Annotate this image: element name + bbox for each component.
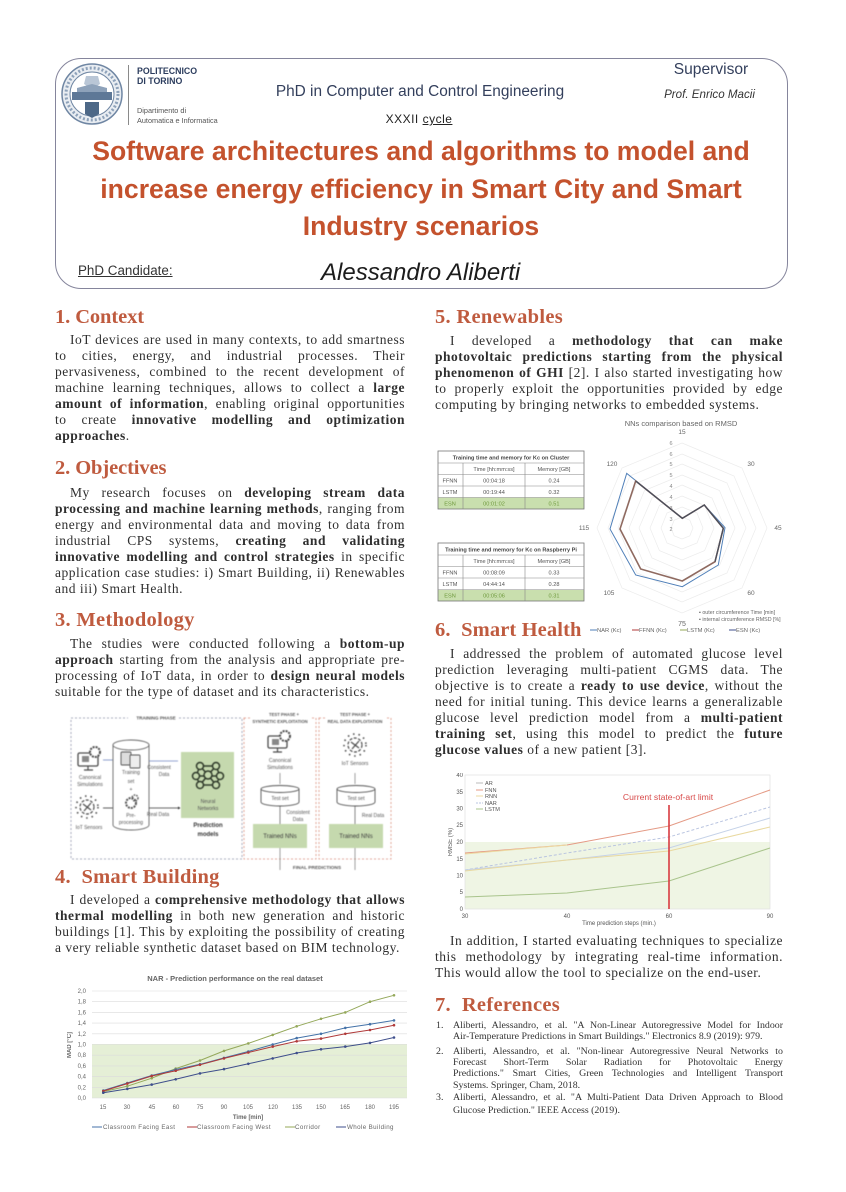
test 2 test set: Test set [347, 796, 365, 802]
table: raspberry pi training time and memory: 00:08:09 [483, 570, 505, 576]
y axis labels: 2,0 [78, 989, 87, 995]
table: raspberry pi training time and memory: 0.28 [549, 582, 559, 588]
y axis labels: 10 [456, 874, 464, 880]
cycle: XXXII cycle [386, 112, 452, 126]
radial scale labels: 3 [669, 517, 673, 523]
arrows into training set [103, 760, 113, 808]
test phase synthetic frame [244, 710, 316, 859]
pipeline diagram: Data [159, 772, 169, 778]
chart title: NAR - Prediction performance on the real dataset [147, 974, 323, 983]
chart legend: AR [485, 781, 493, 787]
x axis labels: 90 [767, 914, 774, 920]
y axis labels [456, 773, 464, 913]
title: increase energy efficiency in Smart City and Smart [100, 174, 742, 204]
text: objectives: industrial CPS systems, creating and validating [55, 533, 405, 548]
y axis labels: 0 [460, 907, 464, 913]
test 1 trained networks [253, 824, 307, 848]
radar axis labels: 15 [678, 429, 686, 436]
arrows to final predictions [280, 848, 355, 870]
radial scale labels: 5 [669, 473, 673, 479]
radar axis labels: 75 [678, 621, 686, 628]
table: cluster training time and memory: Training time and memory for Kc on Cluster [453, 456, 570, 462]
text: smart health: prediction leveraging multi-patient CGMS data. The [435, 662, 783, 677]
table: cluster training time and memory: 0.51 [549, 502, 559, 508]
heading: smart building: 4. Smart Building [55, 866, 220, 888]
y axis labels: 1,2 [78, 1032, 87, 1038]
y axis labels: 35 [456, 790, 464, 796]
line chart: NAR prediction performance [67, 974, 407, 1131]
table: raspberry pi training time and memory: Memory [GB] [538, 559, 571, 565]
table: raspberry pi training time and memory: 00:05:06 [483, 594, 505, 600]
line chart: RMSE vs time prediction steps [448, 773, 774, 927]
table: raspberry pi training time and memory: 04:44:14 [483, 582, 505, 588]
label: iot sensors: IoT Sensors [76, 825, 103, 831]
heading: references: 7. References [435, 994, 560, 1016]
logo divider and university name: Automatica e Informatica [137, 116, 218, 125]
chart legend: Classroom Facing West [197, 1124, 271, 1131]
radar title: NNs comparison based on RMSD [625, 419, 738, 428]
series: NAR [610, 473, 725, 587]
x axis labels: 120 [268, 1105, 279, 1111]
logo divider and university name: Dipartimento di [137, 106, 186, 115]
y axis labels [78, 989, 87, 1102]
radar legend: LSTM (Kc) [687, 628, 715, 634]
text: context: IoT devices are used in many contexts, to add smartness [70, 332, 405, 347]
radial scale labels: 5 [669, 462, 673, 468]
neural networks box: Neural [201, 799, 215, 805]
label: consistent data: Consistent [147, 765, 171, 771]
x axis labels: 135 [292, 1105, 303, 1111]
x axis labels: 40 [564, 914, 571, 920]
text: smart building: a very reliable synthetic dataset based on BIM technology. [55, 940, 400, 955]
test phase real data frame: REAL DATA EXPLOITATION [328, 719, 382, 724]
text: objectives: and iii) Smart Health. [55, 581, 183, 596]
label: canonical simulations: Canonical [79, 775, 101, 781]
references list: Systems. Springer, Cham, 2018. [453, 1080, 580, 1091]
series: ESN [636, 481, 723, 562]
text: context: pervasiveness, combined to the recent development of [55, 364, 405, 379]
chart legend: NAR [485, 801, 497, 807]
chart legend: RNN [485, 794, 497, 800]
green target band [465, 842, 770, 909]
table: cluster training time and memory: Time [hh:mm:ss] [473, 467, 515, 473]
text: smart building: I developed a comprehensive methodology that allows [70, 892, 405, 907]
x axis title: Time prediction steps (min.) [582, 921, 656, 927]
table: raspberry pi training time and memory: 0.33 [549, 570, 559, 576]
x axis labels: 90 [221, 1105, 228, 1111]
text: smart building: thermal modelling in both new generation and historic [55, 908, 405, 923]
series lines [465, 790, 770, 897]
text: smart health: glucose level prediction model from a multi-patient [435, 710, 783, 725]
x axis labels: 15 [100, 1105, 107, 1111]
text: objectives: energy and environmental data and moving to data from [55, 517, 405, 532]
table: cluster training time and memory: LSTM [443, 490, 458, 496]
text: context: machine learning techniques, allows to collect a large [55, 380, 405, 395]
label: real data: Real Data [147, 812, 169, 818]
x axis labels: 60 [173, 1105, 180, 1111]
phd candidate label: PhD Candidate: [78, 263, 173, 278]
text: smart building [55, 892, 405, 955]
references list: Aliberti, Alessandro, et al. "A Multi-Patient Data Driven Approach to Blood [453, 1092, 783, 1103]
text: evaluation follow up: In addition, I started evaluating techniques to specialize [450, 933, 783, 948]
references list: Glucose Prediction." IEEE Access (2019). [453, 1105, 620, 1116]
icon: iot sensors [76, 796, 98, 818]
radar axis labels: 45 [774, 525, 782, 532]
training set cylinder: + [130, 787, 133, 793]
table: cluster training time and memory: 0.32 [549, 490, 559, 496]
label: canonical simulations: Simulations [77, 782, 103, 788]
table: raspberry pi training time and memory: Training time and memory for Kc on Raspberry Pi [445, 548, 577, 554]
text: methodology: processing of IoT data, in order to design neural models [55, 668, 405, 683]
chart legend: Whole Building [347, 1124, 394, 1131]
text: smart health: training set, using this model to predict the future [435, 726, 783, 741]
heading: methodology: 3. Methodology [55, 609, 195, 631]
candidate name: Alessandro Aliberti [321, 259, 520, 286]
text: context: amount of information, enabling original opportunities [55, 396, 405, 411]
test 2 label: iot sensors: IoT Sensors [342, 761, 369, 767]
table: raspberry pi training time and memory [438, 542, 584, 602]
logo divider and university name [128, 65, 229, 125]
text: renewables: I developed a methodology that can make [450, 333, 783, 348]
radial scale labels: 4 [669, 495, 673, 501]
programme title: PhD in Computer and Control Engineering [276, 83, 564, 100]
green target band [92, 1044, 407, 1098]
references list [436, 1020, 783, 1116]
test 1 icon: monitor [268, 731, 290, 752]
text: context: approaches. [55, 428, 130, 443]
radar axis labels: 115 [579, 525, 590, 532]
arrows to neural networks [149, 761, 180, 810]
radial scale labels: 6 [669, 441, 673, 447]
y axis labels: 0,6 [78, 1064, 87, 1070]
label: prediction models: models [197, 832, 219, 838]
text: objectives: processing and machine learning methods, ranging from [55, 501, 405, 516]
y axis labels: 0,4 [78, 1075, 87, 1081]
y axis labels: 0,2 [78, 1085, 87, 1091]
table: cluster training time and memory [438, 450, 584, 510]
series: classroom facing west [103, 1025, 394, 1091]
radial scale labels [669, 441, 673, 533]
test phase real data frame [319, 710, 391, 859]
chart legend: FNN [485, 788, 496, 794]
text: renewables: photovoltaic predictions starting from the physical [435, 349, 783, 364]
references list: Aliberti, Alessandro, et al. "Non-linear Autoregressive Neural Networks to [453, 1046, 783, 1057]
table: raspberry pi training time and memory: Time [hh:mm:ss] [473, 559, 515, 565]
text: renewables: to properly exploit the opportunities provided by edge [435, 381, 783, 396]
test 2 test set [337, 773, 375, 824]
radar notes: ▪ outer circumference Time [min] [699, 610, 776, 616]
radar axis labels: 60 [747, 590, 755, 597]
chart legend [476, 781, 500, 813]
references list: 3. [436, 1092, 443, 1103]
text: objectives: My research focuses on developing stream data [70, 485, 405, 500]
test 1 test set [261, 773, 299, 824]
supervisor name: Prof. Enrico Macii [664, 88, 755, 101]
text: evaluation follow up [435, 933, 783, 980]
y axis labels: 0,8 [78, 1053, 87, 1059]
test 2 icon: iot sensors [344, 734, 366, 756]
test phase real data frame: TEST PHASE + [340, 712, 371, 717]
test phase synthetic frame: SYNTHETIC EXPLOITATION [252, 719, 308, 724]
references list: Forecast Short-Term Solar Radiation for Photovoltaic Energy [453, 1057, 783, 1068]
text: smart building: buildings [1]. This by exploiting the possibility of creating [55, 924, 405, 939]
test phase synthetic frame: TEST PHASE + [269, 712, 300, 717]
y axis labels: 25 [456, 823, 464, 829]
heading: objectives: 2. Objectives [55, 457, 166, 479]
text: renewables: phenomenon of GHI [2]. I also started investigating how [435, 365, 783, 380]
x axis labels: 150 [316, 1105, 327, 1111]
y axis labels: 40 [456, 773, 464, 779]
training phase frame: TRAINING PHASE [136, 716, 176, 720]
references list: Aliberti, Alessandro, et al. "A Non-Linear Autoregressive Model for Indoor [453, 1020, 783, 1031]
text: evaluation follow up: This would allow the tool to specialize on the end-user. [435, 965, 761, 980]
table: cluster training time and memory: Memory [GB] [538, 467, 571, 473]
references list: 1. [436, 1020, 443, 1031]
title: Software architectures and algorithms to model and [92, 136, 750, 166]
radar notes: ▪ internal circumference RMSD [%] [699, 617, 781, 623]
text: smart health: objective is to create a ready to use device, without the [435, 678, 783, 693]
radar legend [590, 628, 760, 634]
series: corridor [103, 995, 394, 1092]
text: methodology: The studies were conducted following a bottom-up [70, 636, 405, 651]
y axis labels: 1,4 [78, 1021, 87, 1027]
logo divider and university name: POLITECNICO [137, 66, 197, 76]
test 1 label: consistent data: Consistent [286, 810, 310, 816]
radar chart: NNs comparison based on RMSD [579, 419, 782, 634]
y axis labels: 1,0 [78, 1042, 87, 1048]
text: smart health: need for initial tuning. This device learns a generalizable [435, 694, 783, 709]
radar legend: FFNN (Kc) [639, 628, 667, 634]
state-of-art label: Current state-of-art limit [623, 792, 714, 802]
radar rings [597, 443, 767, 613]
y axis labels: 1,8 [78, 1000, 87, 1006]
text: objectives: application case studies: i) Smart Building, ii) Renewables [55, 565, 405, 580]
neural networks box [181, 752, 234, 818]
radial scale labels: 4 [669, 484, 673, 490]
radar axis labels: 30 [747, 461, 755, 468]
y axis labels: 1,6 [78, 1010, 87, 1016]
radar legend: NAR (Kc) [597, 628, 622, 634]
icon: university seal [61, 63, 123, 125]
test 1 label: consistent data: Data [293, 817, 303, 823]
radial scale labels: 3 [669, 506, 673, 512]
text: renewables: computing by bringing networks to embedded systems. [435, 397, 759, 412]
chart legend [92, 1124, 394, 1131]
x axis labels: 165 [340, 1105, 351, 1111]
training set cylinder: Pre- [126, 813, 136, 819]
series: whole building [103, 1038, 394, 1093]
text: smart health [435, 646, 783, 757]
table: cluster training time and memory: FFNN [443, 478, 457, 484]
text: methodology: suitable for the type of dataset and its characteristics. [55, 684, 370, 699]
references list: Air-Temperature Predictions in Smart Buildings." Electronics 8.9 (2019): 979. [453, 1031, 762, 1042]
test 1 trained networks: Trained NNs [263, 834, 297, 840]
title [92, 136, 750, 241]
table: cluster training time and memory: 00:01:02 [483, 502, 505, 508]
text: objectives [55, 485, 405, 596]
state-of-art limit line [668, 805, 670, 909]
radar axis labels: 120 [607, 461, 618, 468]
table: raspberry pi training time and memory: FFNN [443, 570, 457, 576]
supervisor: Supervisor [674, 61, 748, 78]
training set cylinder: set [128, 779, 135, 785]
text: smart health: glucose values of a new patient [3]. [435, 742, 647, 757]
text: context: to cities, energy, and industrial processes. Their [55, 348, 405, 363]
test 1 test set: Test set [271, 796, 289, 802]
x axis labels [100, 1105, 400, 1111]
neural networks box: Networks [198, 806, 219, 812]
x axis labels: 30 [124, 1105, 131, 1111]
x axis title: Time [min] [233, 1115, 263, 1121]
table: raspberry pi training time and memory: 0.31 [549, 594, 559, 600]
label: prediction models: Prediction [193, 823, 223, 829]
chart legend: Classroom Facing East [103, 1124, 175, 1131]
table: cluster training time and memory: ESN [444, 502, 456, 508]
chart legend: LSTM [485, 807, 500, 813]
test 2 trained networks [329, 824, 383, 848]
y axis title: MAD [°C] [67, 1032, 73, 1058]
test 1 label: canonical simulations: Canonical [269, 758, 291, 764]
series: classroom facing east [103, 1020, 394, 1090]
x axis labels [462, 914, 774, 920]
text: objectives: innovative modelling and control strategies in specific [55, 549, 405, 564]
radial scale labels: 2 [669, 527, 673, 533]
radar axis labels [579, 429, 782, 628]
y axis labels: 15 [456, 857, 464, 863]
references list: Predictions." Smart Cities, Green Technologies and Intelligent Transport [453, 1068, 783, 1079]
chart legend: Corridor [295, 1124, 321, 1131]
text: renewables [435, 333, 783, 412]
x axis labels: 105 [243, 1105, 254, 1111]
table: cluster training time and memory: 0.24 [549, 478, 559, 484]
series: FFNN and LSTM [620, 481, 723, 581]
table: raspberry pi training time and memory: LSTM [443, 582, 458, 588]
logo divider and university name: DI TORINO [137, 76, 182, 86]
text: context: to create innovative modelling and optimization [55, 412, 405, 427]
y axis title: RMSE (%) [448, 828, 454, 856]
training set cylinder: Training [122, 770, 140, 776]
label: final predictions: FINAL PREDICTIONS [293, 865, 342, 871]
x axis labels: 195 [389, 1105, 400, 1111]
training set cylinder [113, 740, 149, 830]
text: methodology: approach starting from the analysis and appropriate pre- [55, 652, 405, 667]
radar notes [699, 610, 781, 623]
table: cluster training time and memory: 00:04:18 [483, 478, 505, 484]
title: Industry scenarios [303, 211, 539, 241]
x axis labels: 75 [197, 1105, 204, 1111]
heading: smart health: 6. Smart Health [435, 619, 582, 641]
text: context [55, 332, 405, 443]
text: evaluation follow up: this methodology by integrating real-time information. [435, 949, 783, 964]
x axis labels: 60 [666, 914, 673, 920]
test 1 label: canonical simulations: Simulations [267, 765, 293, 771]
table: raspberry pi training time and memory: ESN [444, 594, 456, 600]
text: smart health: I addressed the problem of automated glucose level [450, 646, 783, 661]
training phase frame [71, 713, 242, 859]
y axis labels: 20 [456, 840, 464, 846]
references list: 2. [436, 1046, 443, 1057]
icon: canonical simulations monitor [78, 747, 100, 770]
grid and y axis [92, 991, 407, 1098]
plot frame [465, 775, 770, 909]
table: cluster training time and memory: 00:19:44 [483, 490, 505, 496]
training set cylinder: processing [119, 820, 143, 826]
radar axis labels: 105 [604, 590, 615, 597]
test 2 trained networks: Trained NNs [339, 834, 373, 840]
x axis labels: 30 [462, 914, 469, 920]
heading: renewables: 5. Renewables [435, 306, 563, 328]
label: prediction models [193, 823, 223, 838]
y axis labels: 30 [456, 806, 464, 812]
header panel [55, 58, 788, 289]
x axis labels: 45 [149, 1105, 156, 1111]
y axis labels: 5 [460, 890, 464, 896]
y axis labels: 0,0 [78, 1096, 87, 1102]
radial scale labels: 6 [669, 452, 673, 458]
radar legend: ESN (Kc) [736, 628, 760, 634]
x axis labels: 180 [365, 1105, 376, 1111]
test 2 label: real data: Real Data [362, 813, 384, 819]
text: methodology [55, 636, 405, 699]
pipeline diagram [70, 712, 392, 871]
heading: context: 1. Context [55, 306, 144, 328]
